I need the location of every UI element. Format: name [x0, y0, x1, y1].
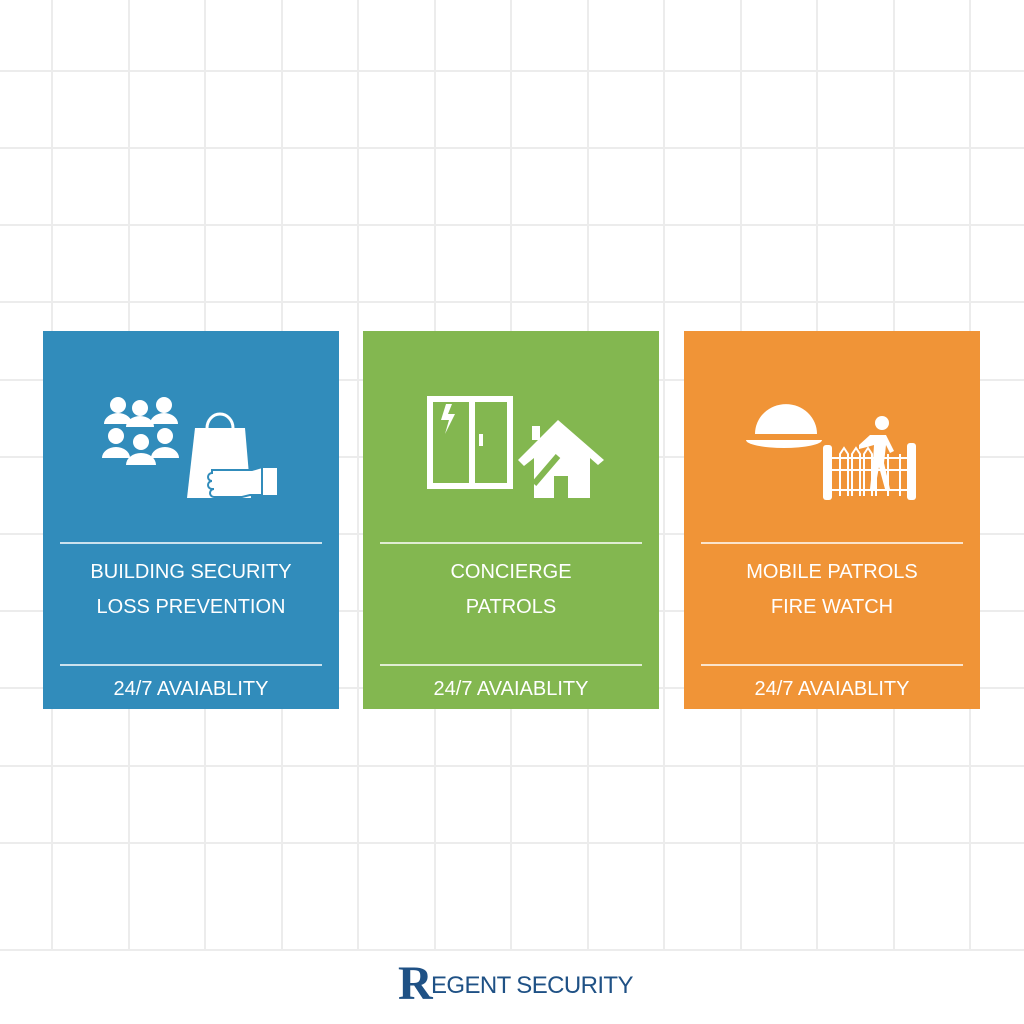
icon: people and shopping bag with hand — [102, 397, 277, 498]
panel: green concierge — [363, 331, 659, 709]
text: services: BUILDING SECURITY — [90, 561, 292, 583]
text: services: MOBILE PATROLS — [746, 561, 918, 583]
logo: Regent Security: R — [398, 957, 433, 1010]
panel: green concierge: PATROLS — [466, 596, 556, 618]
panel: blue building security: LOSS PREVENTION — [97, 596, 285, 618]
panel: orange mobile patrols: FIRE WATCH — [771, 596, 893, 618]
text: availability: 24/7 AVAIABLITY — [434, 678, 588, 700]
text: availability: 24/7 AVAIABLITY — [755, 678, 909, 700]
text: availability: 24/7 AVAIABLITY — [114, 678, 268, 700]
icon: hard hat and person climbing fence — [746, 404, 916, 500]
icon: broken window and house — [427, 396, 604, 498]
panel: orange mobile patrols — [684, 331, 980, 709]
panel: blue building security — [43, 331, 339, 709]
logo: Regent Security: EGENT SECURITY — [431, 972, 633, 999]
logo: Regent Security — [398, 957, 633, 1010]
text: services: CONCIERGE — [450, 561, 572, 583]
